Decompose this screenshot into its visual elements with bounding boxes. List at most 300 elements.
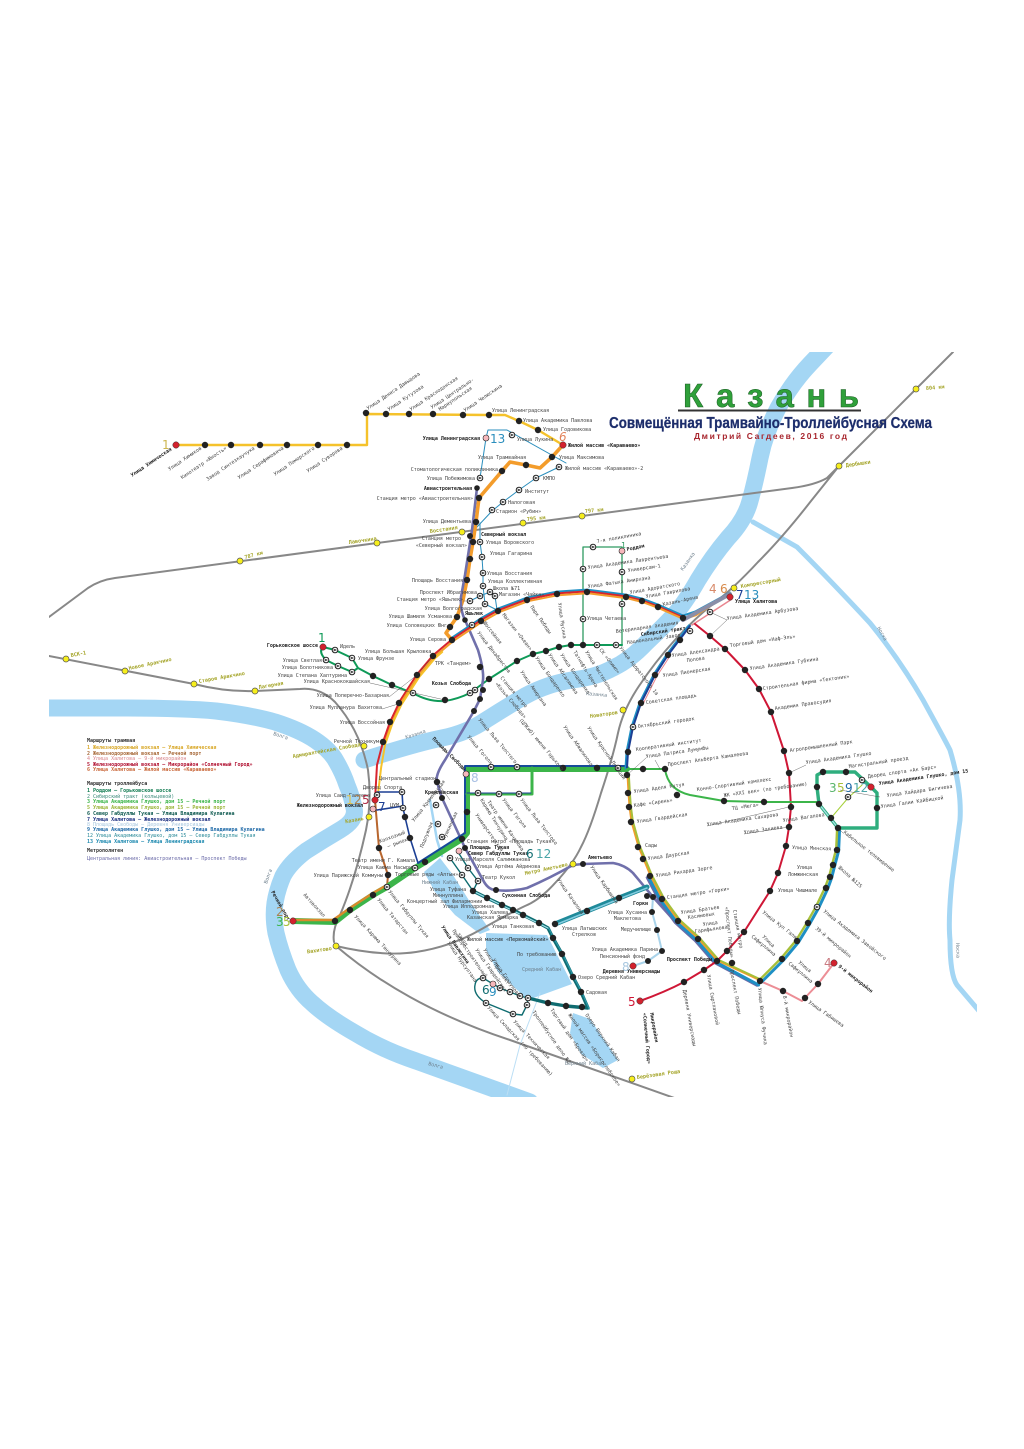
stop labels: centre: Улица Адоратского 1а	[617, 646, 659, 697]
stop labels: east: Улица	[761, 934, 775, 949]
stop labels: east: Академия Правосудия	[774, 698, 832, 712]
stop labels: east: Улица	[797, 865, 812, 871]
stop labels: north-west: Магазин «Чайка»	[499, 592, 544, 598]
stop labels: centre: Улица Складская (по требованию)	[486, 1005, 554, 1078]
stop labels: east: Улица Кул Гали	[761, 910, 798, 941]
legend: tram routes: 2 Железнодорожный вокзал – Речной порт	[87, 751, 201, 757]
legend: trolleybus routes: 1 Роддом – Горьковское шоссе	[87, 788, 171, 794]
canal: Bulak	[430, 800, 442, 856]
stop labels: centre: Торговый дом «Бровар»	[548, 1008, 590, 1063]
railway station labels: Новаторов	[590, 710, 618, 720]
stop labels: east: Проспект Альберта Камалеева	[667, 750, 749, 768]
stop labels: north-west: Улица Ленинградская	[423, 436, 480, 442]
legend: trolleybus routes: 3 Улица Академика Глушко, дом 15 – Речной порт	[87, 799, 225, 805]
stop labels: centre: Улица Артёма Айдинова	[477, 864, 540, 870]
railway stations	[63, 386, 919, 1082]
river: Noska	[753, 522, 980, 1012]
stop labels: centre: Улица Каюма Насыри	[358, 865, 412, 871]
stop labels: north-west: Улица Поперечно-Базарная	[317, 693, 389, 699]
stop labels: north-west: Улица Центрально-	[430, 377, 476, 411]
stop labels: north-west: Улица Дениса Давыдова	[366, 371, 422, 412]
railway station labels: Дербышки	[845, 459, 871, 469]
stop labels: east: Улица Фатыха Амирхана	[587, 575, 651, 590]
stop labels: centre	[269, 602, 659, 1088]
stop labels: east: Улица Гвардейская	[636, 812, 688, 825]
stop labels: east: Улица Рихарда Зорге	[655, 865, 713, 879]
route 1 box	[583, 547, 622, 645]
stations: Kaban section	[470, 861, 622, 1010]
stop labels: north-west: Улица Челюскина	[463, 383, 504, 414]
stop labels: north-west: Улица Воссойная	[340, 720, 385, 726]
legend: trolleybus routes: 7 Улица Халитова – Железнодорожный вокзал	[87, 817, 210, 823]
stop labels: centre: Садовая	[586, 990, 607, 996]
stop labels: centre: Улица Качалова	[555, 878, 584, 916]
railway station labels: Казань	[345, 816, 364, 825]
route numbers: 1	[162, 438, 170, 452]
trunk: Rechnoy Port to Tukaya	[293, 769, 627, 922]
stop labels: north-west: Улица Химическая	[130, 447, 173, 479]
stop labels: east: Улица Академика Глушко	[805, 751, 872, 766]
stop labels: centre: Улица Марселя Салимжанова	[455, 857, 530, 863]
stop labels: centre: Озеро Верхний Кабан	[583, 1012, 622, 1063]
stop labels: east: Улица Академика Завойского	[822, 909, 887, 962]
stop labels: east: «Проспект Победы»	[723, 906, 735, 958]
route numbers: 8	[471, 771, 479, 785]
tram line 5 red	[640, 624, 791, 1001]
route numbers: 7	[378, 800, 386, 814]
route numbers: 9	[489, 985, 497, 999]
stop labels: east: Сафиуллина	[787, 961, 814, 985]
stop labels: centre: (ЦПКиО) имени Горького	[517, 717, 565, 772]
legend: tram routes: Маршруты трамвая	[87, 738, 135, 744]
stop labels: north-west: Улица Кутузова	[387, 384, 425, 413]
stop labels: north-west: Станция метро «Авиастроительная»	[377, 496, 473, 502]
stop labels: north-west: Улица Поморского	[273, 446, 316, 478]
stop labels: centre: Улица Туфана	[430, 887, 466, 893]
stations: western side of ring	[560, 637, 763, 984]
route 8	[633, 896, 662, 966]
legend: trolleybus routes: 2 Сибирский тракт (кольцевой)	[87, 793, 174, 800]
stop labels: centre: Улица Глазунова	[490, 958, 521, 998]
stop labels: north-west: Стадион «Рубин»	[496, 508, 541, 515]
leader lines	[370, 601, 880, 834]
stop labels: east: Улица Академика Глушко, дом 15	[878, 768, 969, 787]
railway station labels: Старое Аракчино	[198, 671, 245, 685]
stop labels: north-west: Улица Суворова	[306, 446, 344, 474]
stop labels: centre: Университетская	[473, 813, 504, 853]
stop labels: east: Улица Закиева	[743, 825, 783, 836]
stop labels: east: Пенсионный фонд	[600, 954, 645, 960]
rivers and lakes	[40, 345, 980, 1102]
thin trolleybus routes	[321, 430, 834, 1001]
stations: upper ring	[380, 589, 686, 801]
stop labels: north-west: Улица Гагарина	[490, 551, 532, 557]
stop labels: north-west: Улица Восстания	[487, 571, 532, 577]
stop labels: north-west: Улица Академика Павлова	[523, 418, 592, 424]
water labels: Казанка	[680, 551, 697, 572]
stop labels: centre: Театр имени Качалова	[485, 800, 525, 852]
railway: main line north-east	[336, 352, 953, 954]
stop labels: east: Улица	[797, 960, 812, 974]
stop labels: east: Универсам-1	[627, 563, 661, 574]
stop labels: east: Улица Хайдара Бигичева	[886, 784, 953, 799]
stop labels: east: Улица Четаева	[587, 616, 626, 622]
stations	[202, 410, 880, 1010]
stop labels: east: Сафиуллина	[750, 934, 777, 958]
map of Kazan tram and trolleybus routes	[49, 352, 977, 1097]
stop labels: centre: Суконная Слобода	[502, 892, 550, 899]
stop labels: east: Улица Гаврилова	[645, 586, 691, 600]
stop labels: north-west: Школа №71	[493, 586, 520, 592]
stop labels: north-west: Станция метро	[422, 536, 461, 542]
stations: tram line 1	[202, 410, 541, 448]
stop labels: centre: Карима Тинчурина	[478, 798, 509, 842]
stop labels: north-west: Идель	[340, 644, 355, 650]
stop labels: centre: Улица Татарстан	[375, 897, 409, 936]
stop labels: centre: Улица Красной Позиции	[585, 726, 627, 781]
route numbers: 6	[559, 430, 567, 444]
stop labels: centre: «Козья Слобода»	[493, 681, 528, 720]
stop labels: centre: Дворец Спорта	[363, 785, 402, 791]
stop labels: centre: Кремлёвская	[425, 790, 458, 796]
stop labels: east: Проспект Победы	[728, 969, 743, 1015]
stop labels: north-west: Улица Болотникова	[282, 665, 333, 671]
route numbers: 13	[744, 588, 759, 602]
stop labels: centre: Приборостроительный	[450, 928, 489, 979]
stop labels: east: Улица Аделя Кутуя	[633, 782, 685, 795]
stop labels: centre: Улица Амирхана	[518, 670, 547, 708]
legend	[87, 738, 265, 862]
route 13	[470, 430, 566, 610]
stop labels: east: Улица Даурская	[647, 850, 690, 862]
route numbers: 5	[283, 915, 291, 929]
route numbers: 5	[362, 793, 370, 807]
railway station labels: ВСК-1	[70, 650, 87, 659]
stop labels: centre: Улица Халева	[472, 910, 508, 916]
stop labels: centre: Улица Льва Толстого	[476, 717, 518, 765]
stop labels: east: Школа №125	[837, 865, 863, 890]
route numbers: 2	[276, 905, 284, 919]
railway station labels: Новое Аракчино	[128, 657, 172, 672]
stop labels: east: 7-я поликлиника	[596, 531, 642, 545]
stop labels: centre: – рынок –	[387, 835, 415, 850]
stop labels: centre: Улица Проспект	[481, 948, 510, 986]
stop labels: east: Проспект Победы	[667, 956, 712, 963]
tram line 2 south part	[375, 800, 388, 887]
legend: trolleybus routes: Маршруты троллейбуса	[87, 780, 147, 787]
stop labels: centre: Улица Абсалямова	[546, 652, 580, 696]
railway station labels: Метро Аметьево	[524, 862, 568, 877]
stop labels: east: Улица Юлиуса Фучика	[756, 988, 768, 1045]
stop labels: east: Горки	[633, 901, 648, 907]
railway station labels: Компрессорный	[740, 577, 781, 590]
green line to Glushko	[627, 769, 817, 802]
stop labels: east: Сады	[645, 843, 657, 849]
stop labels: centre: Север Габдуллы Тукая	[468, 850, 528, 857]
legend: trolleybus routes	[87, 780, 265, 845]
stop labels: centre: Казанская Ярмарка	[467, 915, 518, 921]
stop labels: centre: завод	[455, 932, 469, 947]
legend: metro: Метрополитен	[87, 848, 123, 854]
stop labels: north-west: Улица Серафимовича	[237, 446, 285, 481]
stop labels: east: Роддом	[626, 543, 645, 553]
subtitle: Совмещённая Трамвайно-Троллейбусная Схема	[609, 415, 932, 432]
stop labels: north-west: Станция метро «Яшьлек»	[397, 597, 463, 603]
railway station labels: Адмиралтейская Слобода	[292, 741, 361, 760]
stop labels: centre: Площадь Тукая	[470, 845, 509, 851]
stop labels: east: Улица Хусаина	[608, 910, 647, 916]
stop labels: east: Улица Академика Губкина	[749, 655, 819, 672]
stop labels: centre: Колхозный	[379, 830, 406, 845]
stop labels: north-west: Улица Светлая	[283, 658, 322, 664]
water labels	[263, 551, 961, 1071]
stop labels: north-west: Улица Химиков	[167, 446, 203, 473]
route numbers: 5	[837, 781, 845, 795]
legend: tram routes: 1 Железнодорожный вокзал – Улица Химическая	[87, 745, 216, 751]
stop labels: east: Улица Пионерская	[662, 666, 711, 679]
stop labels: north-west: Козья Слобода	[432, 680, 471, 687]
route numbers: 9	[845, 781, 853, 795]
stop labels: centre: Стрелков	[572, 932, 596, 938]
tram line 1 yellow	[176, 414, 563, 445]
stop labels: north-west: Улица Побежимова	[427, 475, 475, 482]
stop labels: centre: Станция метро	[498, 675, 528, 709]
stop labels: north-west: Мариупольская	[438, 386, 474, 413]
water labels: Верхний Кабан	[565, 1060, 604, 1067]
stop labels: centre: Улица Нурсултана	[445, 941, 478, 984]
stop labels: centre: Татнефть-Арена	[571, 650, 599, 689]
stop labels: north-west: Завод Синтезкаучука	[205, 446, 256, 483]
railway station labels: 795 км	[527, 515, 546, 523]
stop labels: east: 9-й микрорайон	[837, 964, 874, 995]
stop labels: north-west: Улица Краснококшайская	[304, 679, 370, 685]
route numbers: 4	[709, 582, 717, 596]
stop labels: centre: Речной порт	[269, 890, 291, 922]
stop labels: centre: Жилой массив «Первомайский»	[467, 937, 548, 943]
stop labels: east: ЖК «XXI век» (по требованию)	[723, 780, 808, 799]
stop labels: east: Конно-Спортивный комплекс	[696, 777, 772, 793]
stop labels: east: Улица Халитова	[735, 599, 777, 605]
railway station labels: Лагерная	[258, 681, 284, 691]
stop labels: centre: Подлужная	[419, 821, 435, 849]
stop labels: centre: Улица Карима Тинчурина	[353, 914, 402, 967]
stop labels: north-west: Улица Годовикова	[543, 427, 591, 433]
stop labels: centre: Троллейбусное депо №2	[530, 1009, 572, 1065]
stop labels: north-west: Улица Краснодонская	[409, 376, 460, 413]
stop labels: east: Улица Сыртлановой	[705, 974, 720, 1026]
loop terminals	[370, 435, 625, 987]
author credit: Дмитрий Сагдеев, 2016 год	[694, 431, 848, 441]
legend: tram routes: 5 Железнодорожный вокзал – Микрорайон «Солнечный Город»	[87, 762, 253, 768]
legend: tram routes: 4 Улица Халитова – 9-й микрорайон	[87, 756, 186, 762]
railway station labels: 804 км	[926, 384, 945, 392]
stop labels: east: Строительная фирма «Тектоник»	[762, 674, 850, 692]
water labels: Носка	[875, 626, 888, 642]
stop labels: centre: Площадь Свободы	[431, 735, 467, 772]
stop labels: north-west: Улица Серова	[410, 637, 446, 643]
stop labels: east: Деревня Универсиады	[603, 969, 660, 975]
route numbers: 3	[276, 915, 284, 929]
route numbers: 1	[346, 793, 354, 807]
stop labels: centre: Озеро Средний Кабан	[578, 974, 635, 981]
stop labels: east: Магистральный проезд	[848, 756, 909, 770]
route numbers: 12	[853, 781, 868, 795]
stop labels: centre: Улица Кремлёвская	[411, 779, 447, 823]
stop labels: east: Октябрьский городок	[637, 715, 695, 730]
legend: trolleybus routes: 6 Север Габдуллы Тукая – Улица Владимира Кулагина	[87, 810, 235, 817]
lake: Lower Kaban	[424, 858, 490, 934]
stop labels: centre: Улица Карбышева	[588, 864, 620, 905]
route numbers: 2	[354, 793, 362, 807]
legend: metro: Центральная линия: Авиастроительная – Проспект Победы	[87, 855, 247, 862]
stop labels: east: Улица Чишмале	[778, 888, 817, 894]
stop labels: east: Советская площадь	[645, 693, 697, 706]
legend: trolleybus routes: 9 Улица Академика Глушко, дом 15 – Улица Владимира Кулагина	[87, 827, 265, 833]
route numbers: 12	[536, 847, 551, 861]
route numbers: 1	[318, 631, 326, 645]
tram 4 tail	[760, 963, 834, 1001]
stop labels: centre: Театр Кукол	[482, 875, 515, 881]
stop labels: east: Улица Академика Сахарова	[706, 812, 779, 828]
stop labels: centre: Миннуллина	[433, 893, 463, 899]
stop labels: centre: Улица Гоголя	[465, 734, 493, 766]
river: Kazanka	[364, 345, 828, 760]
stop labels: east: Маклетова	[614, 916, 641, 922]
stations: south-west trunk	[332, 809, 470, 924]
stop labels: north-west: Улица Степана Халтурина	[278, 673, 347, 679]
stop labels: north-west: Институт	[525, 489, 549, 495]
route numbers: 6	[720, 582, 728, 596]
stop labels: east: Улица Вагапова	[782, 812, 825, 824]
stop labels: centre: Шоссейная	[481, 621, 503, 646]
stop labels: north-west: Улица Мулланура Вахитова	[310, 705, 382, 711]
stop labels: centre: Концертный зал Филармонии	[407, 899, 482, 905]
stop labels: centre: Пушкинская	[441, 811, 460, 841]
stop labels: north-west: Яшьлек	[465, 611, 483, 617]
stop labels: centre: Улица Павлюхина	[439, 925, 470, 965]
route numbers: 6	[482, 983, 490, 997]
stop labels: centre: Улица Парижской Коммуны	[314, 873, 383, 879]
stop labels: centre: Улица Техническая	[512, 1019, 551, 1061]
stop labels: east: Улица Братьев	[680, 905, 720, 916]
stop labels: centre: Жилой массив «Борисоглебское»	[566, 1012, 622, 1088]
stop labels: centre: Торговые ряды «Алтын»	[395, 872, 458, 878]
water labels: Волга	[427, 1061, 444, 1071]
stop labels: east: Улица	[702, 920, 718, 928]
stop labels: east: «Солнечный Город»	[641, 1013, 651, 1064]
stop labels: east: Касимовых	[687, 911, 715, 921]
stop labels: north-west: Улица Соловецких Юнг	[387, 623, 447, 629]
trunk orange overlay	[293, 885, 387, 920]
stop labels: north-west: КМПО	[543, 476, 555, 482]
stop labels: east: Микрорайон	[648, 1012, 659, 1043]
stop labels: north-west: Улица Лукина	[517, 437, 553, 443]
stop labels: north-west: «Северный вокзал»	[416, 543, 467, 549]
lake: Upper Kaban	[570, 1013, 618, 1068]
multicolour band	[647, 878, 757, 986]
stop labels: north-west: Улица Фрунзе	[358, 656, 394, 662]
route numbers: 4	[824, 956, 832, 970]
metro central line	[437, 488, 717, 960]
route 7 navy	[377, 792, 467, 863]
railway station labels: Вахитово	[307, 946, 332, 955]
stop labels: centre: Улица Чистопольская	[583, 650, 619, 702]
water labels: Казанка	[405, 729, 427, 741]
stop labels: east: Агропромышленный Парк	[789, 739, 853, 754]
stop labels: east: Национальный Завод	[626, 632, 681, 646]
stop labels: centre: Центральный стадион	[379, 776, 436, 782]
route numbers: 6	[526, 847, 534, 861]
route 1	[321, 645, 622, 701]
stop labels: centre: Улица Бондаренко	[558, 653, 591, 696]
stop labels: east: 39-й микрорайон	[814, 926, 852, 960]
water labels: Волга	[272, 731, 289, 742]
route numbers	[162, 430, 868, 1009]
stop labels: north-west: ТРК «Тандем»	[435, 661, 471, 667]
stop labels: centre: По требованию	[517, 951, 556, 958]
legend: trolleybus routes: 5 Улица Академика Глушко, дом 15 – Речной порт	[87, 805, 225, 811]
stop labels: centre: Парк Победы	[528, 604, 553, 635]
stop labels: centre: СК «Олимп»	[597, 648, 621, 675]
trunk navy overlay	[418, 766, 627, 863]
water labels: Средний Кабан	[522, 966, 561, 973]
stop labels: north-west: Улица Дементьева	[423, 519, 471, 525]
stop labels: east: Улица Александра	[671, 646, 720, 659]
stop labels: east: Кабельное телевидение	[842, 829, 896, 873]
legend: trolleybus routes: 13 Улица Халитова – Улица Ленинградская	[87, 839, 204, 845]
stop labels: centre: Автовокзал	[302, 892, 326, 919]
stop labels: centre: Улица Латышских	[562, 926, 607, 932]
stop labels: east	[587, 531, 969, 1064]
stations: red ring	[681, 633, 794, 985]
stop labels: east: ТЦ «Мега»	[731, 802, 759, 812]
stop labels: north-west: Северный вокзал	[481, 532, 526, 538]
stop labels: east: Станция метро	[731, 909, 744, 949]
stop labels: east: Улица Габишева	[807, 999, 845, 1029]
stop labels: north-west: Стоматологическая поликлиника	[411, 467, 498, 473]
stop labels: centre: Улица Танковая	[492, 924, 534, 930]
railway station labels: Берёзовая Роща	[636, 1069, 681, 1081]
route numbers: 5	[628, 995, 636, 1009]
stop labels: east: Станция метро «Горки»	[666, 886, 730, 901]
stop labels: north-west: Улица Максимова	[559, 455, 604, 461]
title underline	[678, 410, 861, 412]
lake: Middle Kaban	[486, 933, 572, 1000]
terminal loop	[817, 772, 877, 828]
river: Volga	[40, 708, 530, 1102]
stream south of Kaban	[507, 993, 540, 1095]
route numbers: 8	[622, 960, 630, 974]
loop on second horizontal	[467, 768, 532, 794]
route numbers: 1	[621, 541, 626, 550]
stop labels: east: Деревня Универсиады	[681, 989, 697, 1047]
one-way stations	[323, 432, 865, 1017]
stop labels: centre: Улица Мусина	[556, 602, 567, 639]
legend: metro	[87, 848, 247, 862]
stop labels: east: Торговый дом «Наф-Эль»	[729, 634, 796, 649]
stop labels: centre: Магазин «Океан»	[500, 613, 533, 652]
stop labels: north-west: Улица Волгоградская	[425, 606, 482, 612]
stop labels: east: Улица Адоратского	[629, 581, 681, 596]
stop labels: east: Улица Академика Лаврентьева	[587, 554, 669, 571]
water labels: Казанка	[586, 691, 607, 699]
railway station labels: 797 км	[585, 507, 604, 515]
stop labels: east: Кооперативный институт	[635, 738, 702, 753]
stop labels: east: Улица Академика Парина	[592, 947, 658, 953]
railway: south-east line	[336, 946, 680, 1100]
stop labels: centre: Улица Бондаренко	[533, 656, 566, 699]
stop labels: north-west: Улица Шамиля Усманова	[389, 614, 452, 620]
